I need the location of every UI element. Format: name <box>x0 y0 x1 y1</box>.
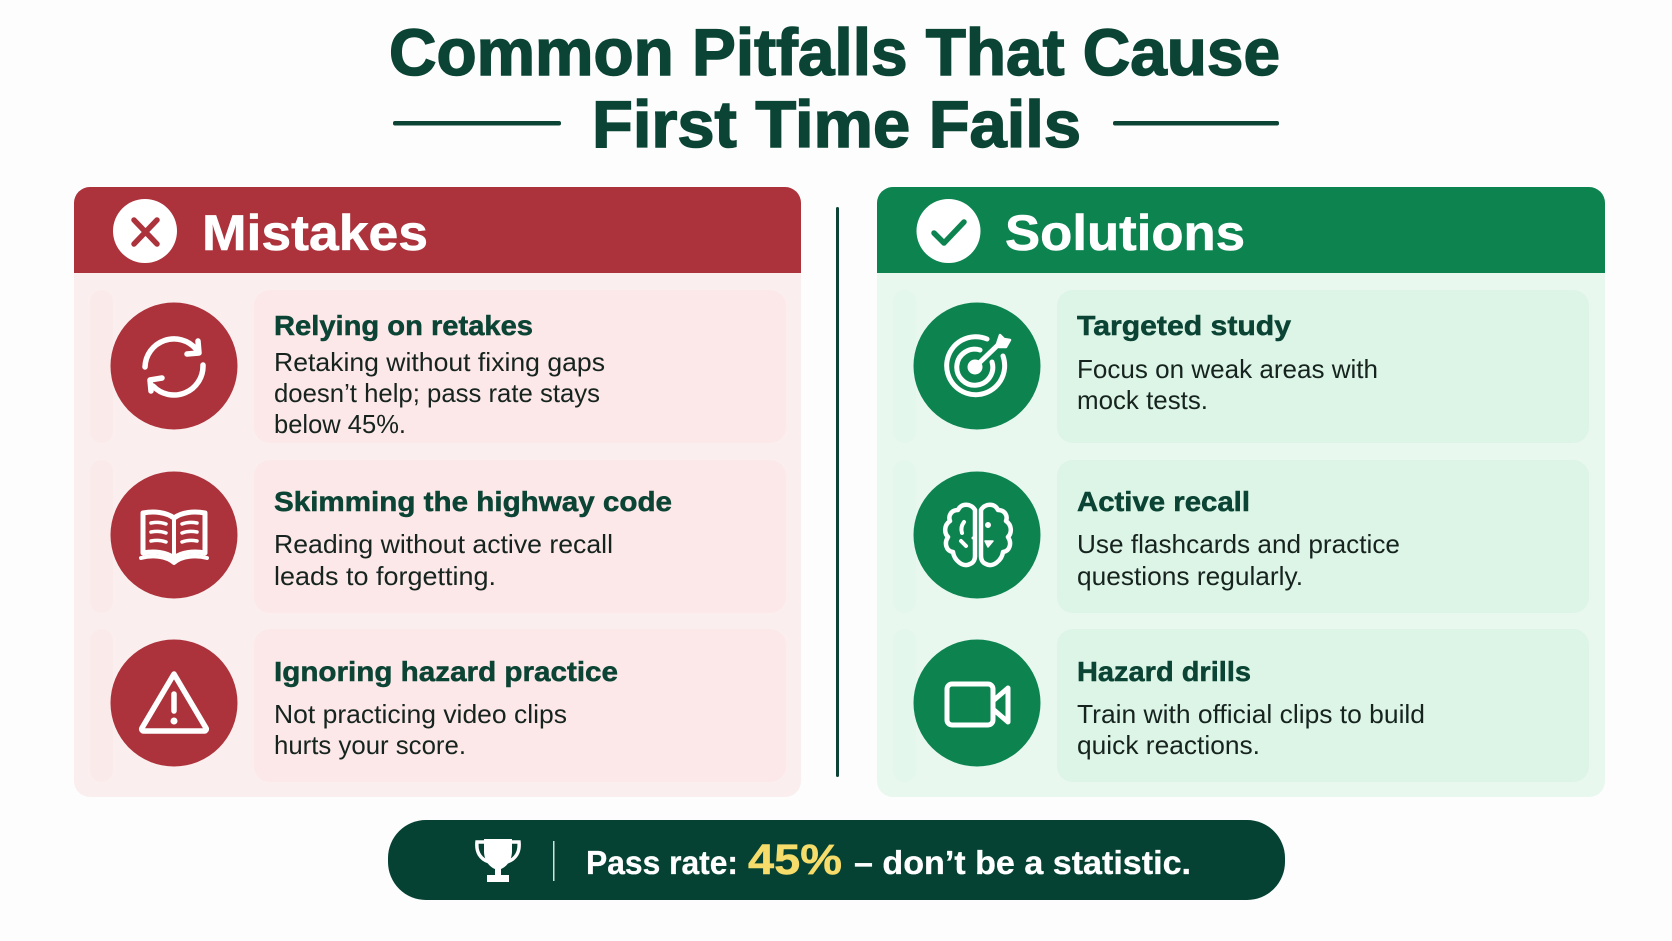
solution row: active recall: Use flashcards and practice <box>1077 529 1400 559</box>
panel: mistakes <box>74 187 801 797</box>
mistake row: ignoring hazard practice: hurts your score. <box>274 730 466 760</box>
solution row: hazard drills: Hazard drills <box>1077 656 1251 687</box>
footer callout: pass rate <box>388 820 1285 900</box>
mistake row: skimming the highway code <box>90 460 786 613</box>
center divider <box>836 207 839 777</box>
title <box>389 15 1280 161</box>
panel header: solutions: Solutions <box>1005 205 1245 261</box>
solution row: targeted study: mock tests. <box>1077 385 1208 415</box>
icon: target with arrow <box>947 335 1010 395</box>
icon: video camera <box>947 684 1008 725</box>
icon: warning triangle <box>142 674 206 731</box>
mistake row: skimming the highway code: Reading without active recall <box>274 529 613 559</box>
mistake row: ignoring hazard practice: Not practicing video clips <box>274 699 567 729</box>
solution row: targeted study: Targeted study <box>1077 310 1291 341</box>
solution row: active recall <box>893 460 1589 613</box>
footer callout: pass rate: – don’t be a statistic. <box>854 844 1191 881</box>
title: First Time Fails <box>592 87 1081 161</box>
panel header: mistakes <box>74 187 801 273</box>
title: Common Pitfalls That Cause <box>389 15 1280 89</box>
mistake row: relying on retakes <box>90 290 786 443</box>
icon: open book <box>141 512 207 563</box>
solution row: targeted study: Focus on weak areas with <box>1077 354 1378 384</box>
solution row: hazard drills: quick reactions. <box>1077 730 1260 760</box>
icon: brain <box>945 505 1011 565</box>
footer callout: pass rate: 45% <box>748 836 842 884</box>
solution row: active recall: questions regularly. <box>1077 561 1303 591</box>
icon: trophy <box>477 839 519 882</box>
mistake row: ignoring hazard practice <box>90 629 786 782</box>
mistake row: relying on retakes: doesn’t help; pass rate stays <box>274 378 600 408</box>
mistake row: relying on retakes: Relying on retakes <box>274 310 533 341</box>
panel header: mistakes: Mistakes <box>202 205 428 261</box>
mistake row: relying on retakes: below 45%. <box>274 409 406 439</box>
mistake row: relying on retakes: Retaking without fixing gaps <box>274 347 605 377</box>
footer callout: pass rate: Pass rate: <box>586 844 738 881</box>
mistake row: skimming the highway code: Skimming the highway code <box>274 486 672 517</box>
mistake row: skimming the highway code: leads to forgetting. <box>274 561 496 591</box>
solution row: targeted study <box>893 290 1589 443</box>
panel: solutions <box>877 187 1605 797</box>
mistake row: ignoring hazard practice: Ignoring hazard practice <box>274 656 618 687</box>
solution row: hazard drills <box>893 629 1589 782</box>
solution row: active recall: Active recall <box>1077 486 1250 517</box>
solution row: hazard drills: Train with official clips to build <box>1077 699 1425 729</box>
panel header: solutions <box>877 187 1605 273</box>
icon: refresh <box>145 339 203 395</box>
